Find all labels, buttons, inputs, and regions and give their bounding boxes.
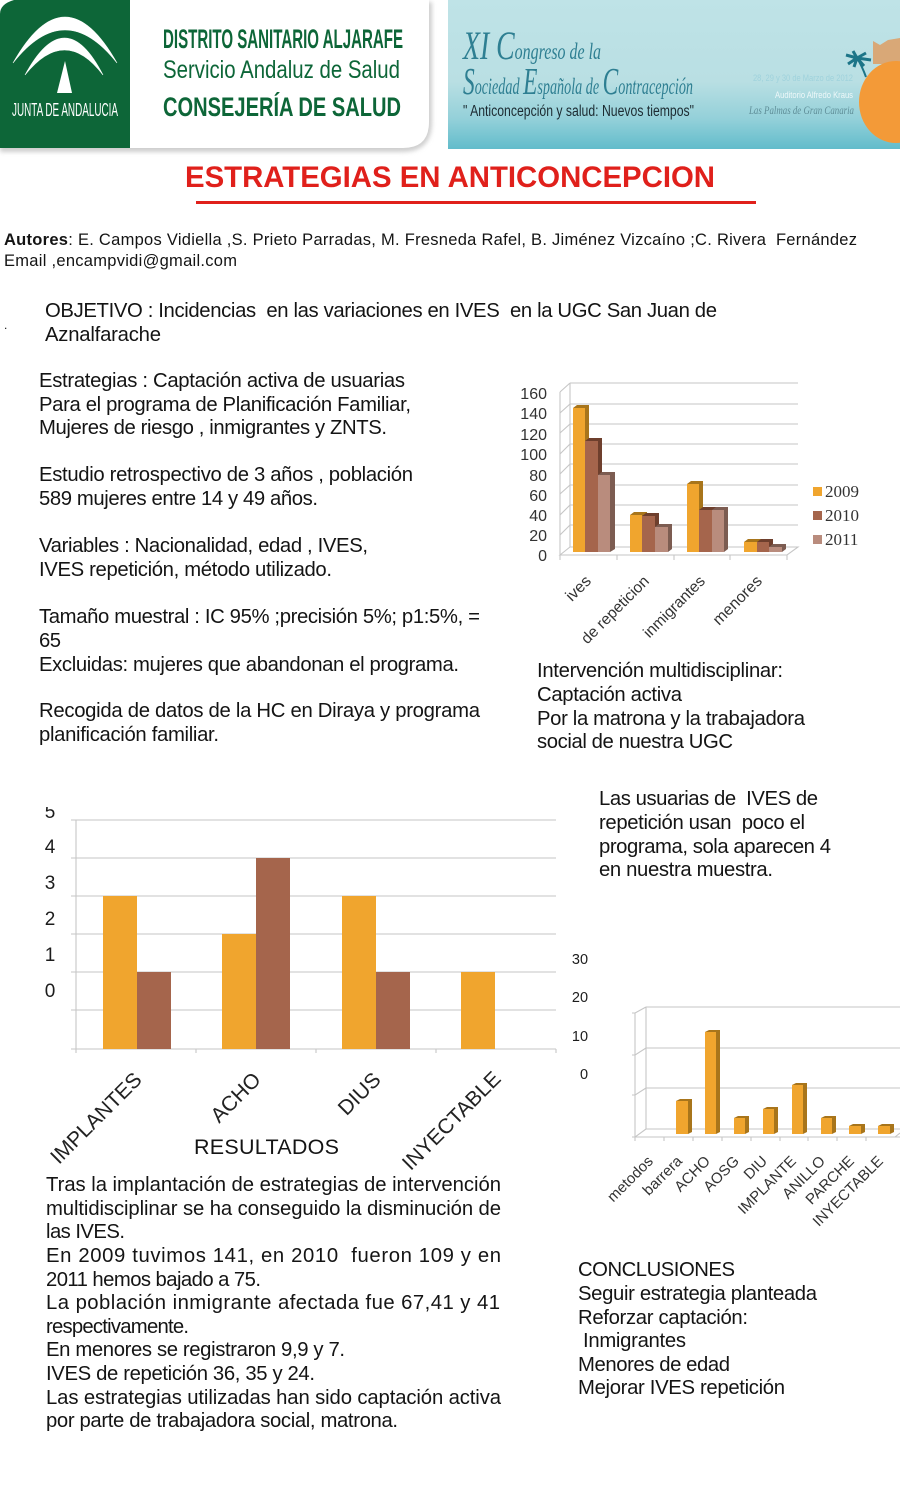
x axis labels: ACHO bbox=[206, 1068, 266, 1127]
conclusions text: Seguir estrategia planteada bbox=[578, 1283, 818, 1305]
objective text: OBJETIVO : Incidencias en las variaciones en IVES en la UGC San Juan de bbox=[45, 300, 717, 322]
bars: ives bbox=[573, 405, 615, 552]
authors block bbox=[4, 231, 857, 332]
icon: Junta de Andalucia emblem bbox=[0, 0, 130, 148]
y axis labels bbox=[572, 952, 588, 1083]
objective text bbox=[45, 300, 717, 346]
y axis labels: 2 bbox=[45, 909, 55, 930]
x axis labels: inmigrantes bbox=[640, 573, 709, 641]
header banner: XI Congreso de la Sociedad Española de Contracepción: Auditorio Alfredo Kraus bbox=[775, 90, 853, 101]
methods text: planificación familiar. bbox=[39, 724, 219, 746]
x axis labels: INYECTABLE bbox=[398, 1067, 506, 1175]
x axis labels: de repeticion bbox=[578, 573, 653, 648]
y axis labels bbox=[45, 807, 55, 997]
methods text bbox=[39, 370, 481, 746]
x axis labels bbox=[46, 1067, 506, 1175]
bar chart: methods in repeat abortions bbox=[45, 802, 556, 1175]
methods text: IVES repetición, método utilizado. bbox=[39, 559, 332, 581]
x axis labels: INYECTABLE bbox=[810, 1153, 887, 1230]
y axis labels: 4 bbox=[45, 837, 56, 858]
intervention text bbox=[537, 660, 806, 753]
methods text: Estudio retrospectivo de 3 años , población bbox=[39, 464, 413, 486]
methods text: Estrategias : Captación activa de usuarias bbox=[39, 370, 405, 392]
x axis labels: metodos bbox=[604, 1153, 657, 1206]
3D bar chart: ives by year bbox=[520, 383, 859, 648]
header banner: XI Congreso de la Sociedad Española de Contracepción: Sociedad Española de Contracepción bbox=[463, 61, 693, 103]
x axis labels: PARCHE bbox=[802, 1153, 858, 1208]
x axis labels: ANILLO bbox=[779, 1153, 829, 1203]
bars: de repeticion bbox=[630, 512, 672, 552]
legend: 2011 bbox=[825, 530, 858, 549]
x axis labels: DIU bbox=[741, 1153, 771, 1183]
methods text: Recogida de datos de la HC en Diraya y programa bbox=[39, 700, 481, 722]
y axis labels: 20 bbox=[529, 528, 547, 545]
x axis labels: AOSG bbox=[700, 1153, 743, 1195]
repeat users text: en nuestra muestra. bbox=[599, 859, 773, 881]
results text: 2011 hemos bajado a 75. bbox=[46, 1269, 261, 1291]
x axis labels: menores bbox=[710, 573, 766, 629]
y axis labels: 140 bbox=[520, 406, 547, 423]
y axis labels: 30 bbox=[572, 952, 588, 968]
y axis labels: 5 bbox=[45, 802, 55, 823]
results text: las IVES. bbox=[46, 1221, 125, 1243]
bars: dius bbox=[342, 896, 410, 1049]
intervention text: Intervención multidisciplinar: bbox=[537, 660, 783, 682]
y axis labels: 60 bbox=[529, 488, 547, 505]
results text: La población inmigrante afectada fue 67,41 y 41 bbox=[46, 1292, 500, 1314]
results text: por parte de trabajadora social, matrona. bbox=[46, 1410, 398, 1432]
header banner: XI Congreso de la Sociedad Española de Contracepción: 28, 29 y 30 de Marzo de 2012 bbox=[753, 73, 853, 84]
y axis labels: 160 bbox=[520, 386, 547, 403]
header logo panel: Distrito Sanitario Aljarafe bbox=[0, 0, 432, 152]
methods text: Tamaño muestral : IC 95% ;precisión 5%; p1:5%, = bbox=[39, 606, 480, 628]
results text: Las estrategias utilizadas han sido captación activa bbox=[46, 1387, 502, 1409]
y axis labels: 3 bbox=[45, 873, 55, 894]
methods text: Variables : Nacionalidad, edad , IVES, bbox=[39, 535, 368, 557]
intervention text: Captación activa bbox=[537, 684, 683, 706]
header banner: XI Congreso de la Sociedad Española de Contracepción bbox=[448, 0, 900, 149]
methods text: 589 mujeres entre 14 y 49 años. bbox=[39, 488, 318, 510]
x axis labels bbox=[604, 1152, 887, 1230]
logo text lines: CONSEJERÍA DE SALUD bbox=[163, 91, 401, 122]
x axis labels bbox=[563, 573, 766, 648]
logo text lines bbox=[163, 24, 403, 122]
header banner: XI Congreso de la Sociedad Española de Contracepción: " Anticoncepción y salud: Nuevos tiempos" bbox=[463, 103, 694, 120]
3D bar chart: contraceptive methods bbox=[572, 952, 900, 1230]
conclusions text: Menores de edad bbox=[578, 1354, 730, 1376]
bars: acho bbox=[222, 858, 290, 1049]
results text: En menores se registraron 9,9 y 7. bbox=[46, 1339, 345, 1361]
conclusions text: Reforzar captación: bbox=[578, 1307, 748, 1329]
conclusions text: Mejorar IVES repetición bbox=[578, 1377, 785, 1399]
bars: methods bbox=[676, 1030, 894, 1134]
x axis labels: DIUS bbox=[334, 1068, 386, 1120]
objective text: Aznalfarache bbox=[45, 324, 161, 346]
y axis labels: 40 bbox=[529, 508, 547, 525]
repeat users text: programa, sola aparecen 4 bbox=[599, 836, 831, 858]
bars: inmigrantes bbox=[687, 481, 728, 552]
x axis labels: IMPLANTE bbox=[735, 1153, 800, 1218]
intervention text: social de nuestra UGC bbox=[537, 731, 733, 753]
y axis labels: 0 bbox=[580, 1067, 588, 1083]
methods text: Para el programa de Planificación Familiar, bbox=[39, 394, 411, 416]
bars: inyectable bbox=[461, 972, 495, 1049]
x axis labels: ACHO bbox=[671, 1153, 714, 1195]
results text: Tras la implantación de estrategias de intervención bbox=[46, 1174, 501, 1196]
x axis labels: ives bbox=[563, 573, 595, 605]
repeat users text: Las usuarias de IVES de bbox=[599, 788, 818, 810]
y axis labels: 120 bbox=[520, 427, 547, 444]
conclusions text: Inmigrantes bbox=[583, 1330, 686, 1352]
authors block: Email ,encampvidi@gmail.com bbox=[4, 252, 237, 270]
x axis labels: IMPLANTES bbox=[46, 1068, 147, 1169]
conclusions text bbox=[578, 1259, 818, 1399]
results text: multidisciplinar se ha conseguido la disminución de bbox=[46, 1198, 501, 1220]
results text: En 2009 tuvimos 141, en 2010 fueron 109 y en bbox=[46, 1245, 501, 1267]
y axis labels: 0 bbox=[45, 981, 55, 1002]
results heading: RESULTADOS bbox=[194, 1135, 339, 1159]
authors block: . bbox=[4, 318, 7, 332]
icon: fort, palm and orange sun bbox=[846, 38, 900, 143]
icon: Junta de Andalucia emblem: JUNTA DE ANDALUCIA bbox=[12, 100, 118, 120]
authors block: Autores: E. Campos Vidiella ,S. Prieto Parradas, M. Fresneda Rafel, B. Jiménez Vizcaíno ;C. Rivera Fernández bbox=[4, 231, 857, 249]
results text: IVES de repetición 36, 35 y 24. bbox=[46, 1363, 315, 1385]
header banner: XI Congreso de la Sociedad Española de Contracepción: XI Congreso de la bbox=[462, 23, 601, 68]
y axis labels: 100 bbox=[520, 447, 547, 464]
repeat users text bbox=[599, 788, 831, 881]
results text: respectivamente. bbox=[46, 1316, 189, 1338]
y axis labels: 80 bbox=[529, 468, 547, 485]
y axis labels: 1 bbox=[45, 945, 55, 966]
y axis labels bbox=[520, 386, 547, 565]
logo text lines: DISTRITO SANITARIO ALJARAFE bbox=[163, 24, 403, 54]
methods text: 65 bbox=[39, 630, 61, 652]
header banner: XI Congreso de la Sociedad Española de Contracepción: Las Palmas de Gran Canaria bbox=[748, 103, 854, 117]
y axis labels: 20 bbox=[572, 990, 588, 1006]
x axis labels: barrera bbox=[640, 1152, 686, 1199]
logo text lines: Servicio Andaluz de Salud bbox=[163, 56, 400, 84]
legend: 2009 bbox=[825, 482, 859, 501]
conclusions text: CONCLUSIONES bbox=[578, 1259, 735, 1281]
methods text: Excluidas: mujeres que abandonan el programa. bbox=[39, 654, 459, 676]
bars: implantes bbox=[103, 896, 171, 1049]
y axis labels: 0 bbox=[538, 548, 547, 565]
legend bbox=[813, 482, 859, 549]
methods text: Mujeres de riesgo , inmigrantes y ZNTS. bbox=[39, 417, 387, 439]
y axis labels: 10 bbox=[572, 1029, 588, 1045]
bars: menores bbox=[744, 539, 786, 552]
title: ESTRATEGIAS EN ANTICONCEPCION bbox=[185, 161, 715, 194]
intervention text: Por la matrona y la trabajadora bbox=[537, 708, 806, 730]
results text bbox=[46, 1174, 502, 1432]
repeat users text: repetición usan poco el bbox=[599, 812, 805, 834]
legend: 2010 bbox=[825, 506, 859, 525]
